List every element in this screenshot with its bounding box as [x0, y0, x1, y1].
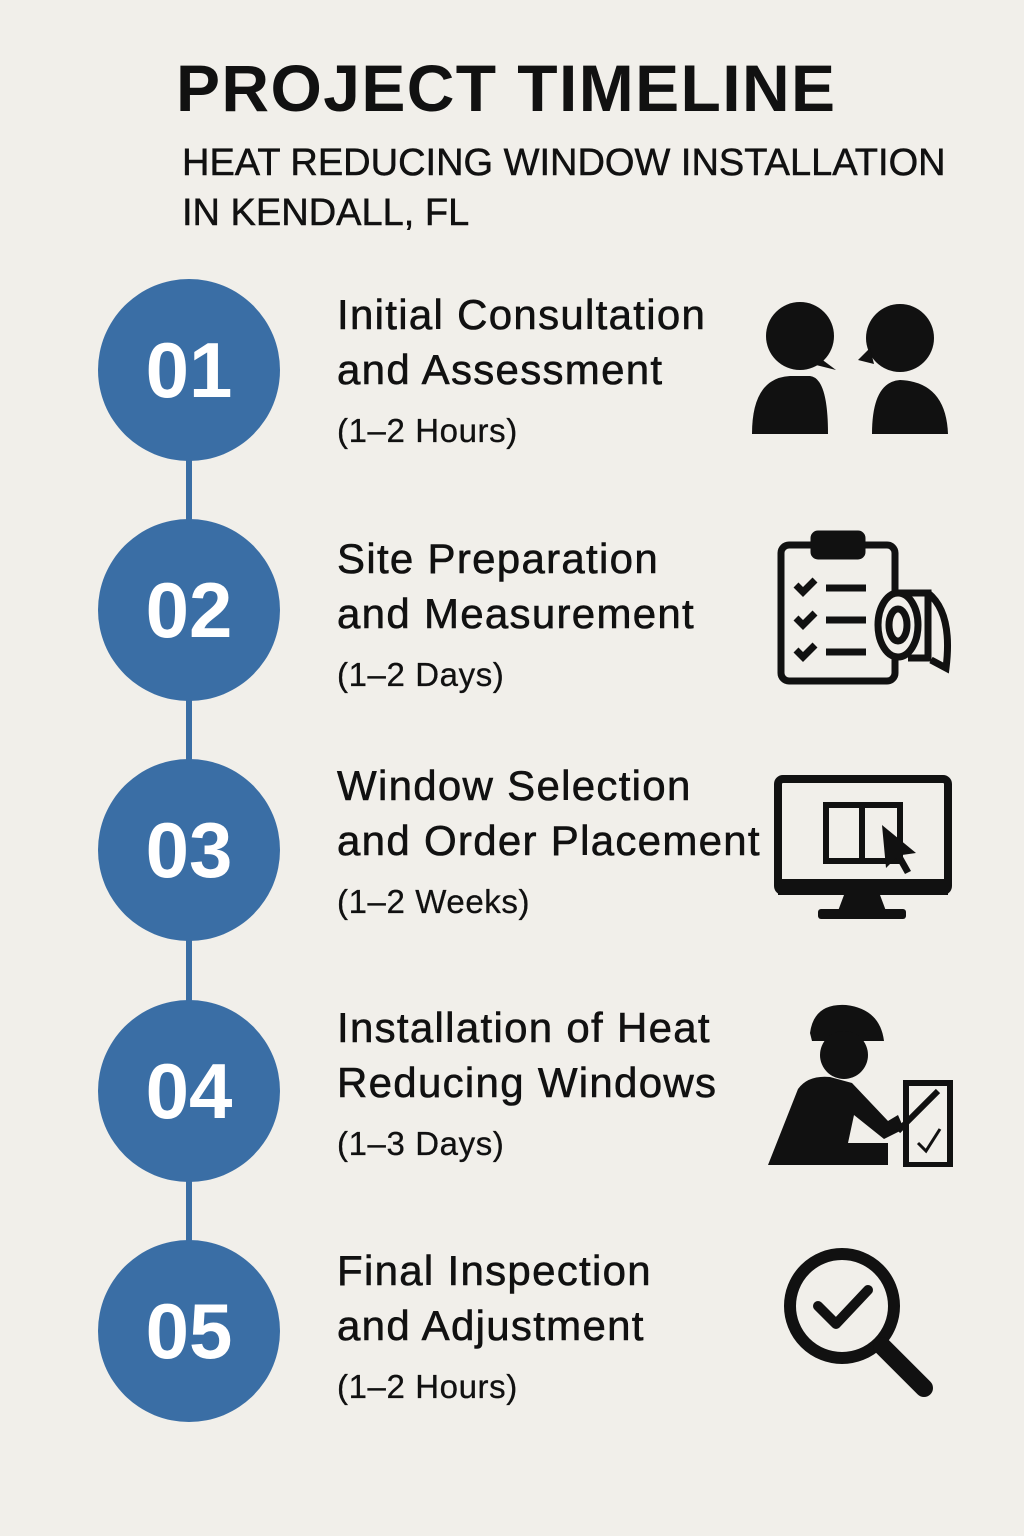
- step 3 text: (1–2 Weeks): [337, 883, 530, 920]
- step 4 text: (1–3 Days): [337, 1125, 504, 1162]
- step 3 badge: 03: [146, 806, 232, 894]
- step 3 text: and Order Placement: [337, 817, 761, 864]
- step 4 text: [337, 1004, 717, 1162]
- step 2 text: Site Preparation: [337, 535, 659, 582]
- step 5 text: Final Inspection: [337, 1247, 652, 1294]
- step 2 text: and Measurement: [337, 590, 695, 637]
- step 4 badge: 04: [146, 1046, 232, 1134]
- icon: clipboard and tape: [778, 530, 952, 684]
- step 5 badge: 05: [146, 1286, 232, 1374]
- timeline connector: [186, 400, 192, 1300]
- step 1 text: and Assessment: [337, 346, 663, 393]
- subtitle: [182, 142, 946, 234]
- step 4 badge: [98, 1000, 280, 1182]
- step 2 badge: [98, 519, 280, 701]
- step 3 text: Window Selection: [337, 762, 692, 809]
- step 5 text: [337, 1247, 652, 1406]
- step 5 text: (1–2 Hours): [337, 1368, 518, 1405]
- icon: consultation people: [752, 302, 948, 434]
- step 4 text: Reducing Windows: [337, 1059, 717, 1106]
- step 3 text: [336, 762, 761, 920]
- step 5 text: and Adjustment: [337, 1302, 645, 1349]
- step 2 badge: 02: [146, 566, 232, 654]
- step 1 text: (1–2 Hours): [337, 412, 518, 449]
- step 1 text: Initial Consultation: [337, 291, 706, 338]
- icon: computer monitor: [774, 775, 952, 919]
- step 4 text: Installation of Heat: [337, 1004, 711, 1051]
- subtitle: HEAT REDUCING WINDOW INSTALLATION: [182, 142, 946, 184]
- icon: magnifier check: [784, 1248, 933, 1397]
- step 1 text: [337, 291, 706, 450]
- step 1 badge: [98, 279, 280, 461]
- step 1 badge: 01: [146, 326, 232, 414]
- step 5 badge: [98, 1240, 280, 1422]
- step 2 text: (1–2 Days): [337, 656, 504, 693]
- subtitle: IN KENDALL, FL: [182, 192, 469, 234]
- title: PROJECT TIMELINE: [176, 51, 836, 125]
- step 2 text: [337, 535, 695, 694]
- step 3 badge: [98, 759, 280, 941]
- icon: installer worker: [768, 1004, 953, 1167]
